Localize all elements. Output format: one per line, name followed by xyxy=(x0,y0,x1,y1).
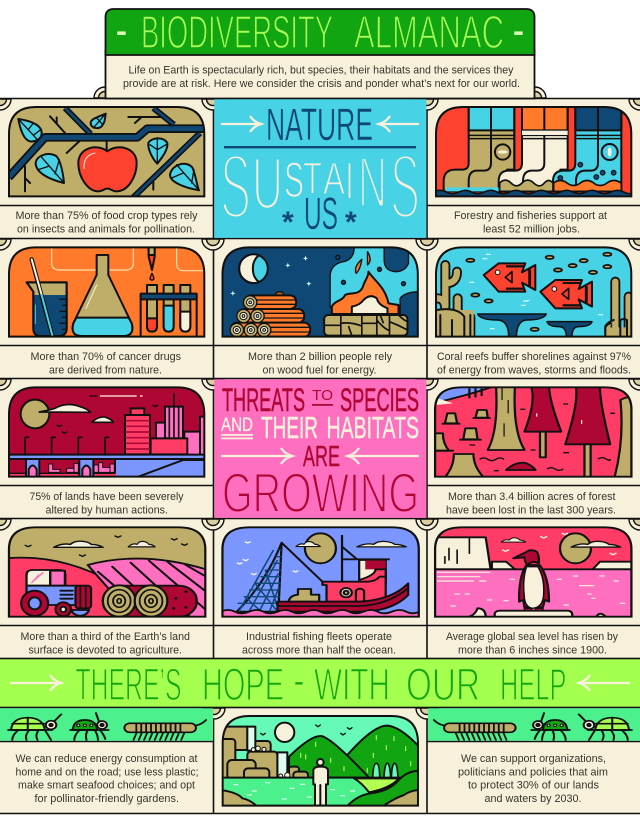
text: actions right: and waters by 2030. xyxy=(484,793,582,805)
heading: and: AND xyxy=(221,415,253,436)
illustration: logged forest xyxy=(433,383,637,478)
text: actions right: politicians and policies that aim xyxy=(458,766,608,778)
caption: sea level: Average global sea level has risen by xyxy=(446,631,618,643)
heading: sustains: A xyxy=(323,153,345,204)
heading: to: TO xyxy=(312,387,333,404)
heading: habitats: HABITATS xyxy=(326,410,419,445)
caption: fishing fleets xyxy=(242,631,396,656)
caption: cancer drugs xyxy=(30,351,181,376)
illustration: coral reef and fish xyxy=(436,247,631,337)
caption: pollination: More than 75% of food crop types rely xyxy=(16,210,198,222)
caption: lands altered xyxy=(30,491,184,516)
illustration: city xyxy=(7,387,210,479)
heading: sustains: I xyxy=(347,153,352,209)
illustration: apple and leaves xyxy=(9,107,207,197)
panel: threats are growing xyxy=(214,379,426,524)
heading: nature: NATURE xyxy=(266,99,373,150)
caption: wood fuel: More than 2 billion people rely xyxy=(248,351,392,363)
caption: fishing fleets: Industrial fishing fleets operate xyxy=(246,631,392,643)
text: actions left: We can reduce energy consumption at xyxy=(16,753,198,765)
illustration: laboratory xyxy=(9,245,207,337)
illustration: boots xyxy=(434,105,636,198)
asterisk left: * xyxy=(282,206,294,239)
caption: forest lost: have been lost in the last 300 years. xyxy=(446,504,616,516)
panel: nature sustains us: S xyxy=(390,136,420,238)
caption: sea level: more than 6 inches since 1900. xyxy=(458,644,607,656)
caption: fishing fleets: across more than half the ocean. xyxy=(242,644,396,656)
caption: cancer drugs: are derived from nature. xyxy=(49,364,162,376)
banner: there's hope xyxy=(0,658,640,710)
insect strip right xyxy=(428,708,640,741)
title word one: BIODIVERSITY xyxy=(141,6,333,58)
caption: coral reefs xyxy=(437,351,631,376)
intro text xyxy=(123,64,520,90)
title word two: ALMANAC xyxy=(354,6,504,58)
title dash right: - xyxy=(513,15,524,48)
heading: sustains: S xyxy=(284,152,304,208)
text: actions right: We can support organizations, xyxy=(461,753,606,765)
text: actions left: for pollinator-friendly gardens. xyxy=(34,793,179,805)
banner heading: HELP xyxy=(500,659,566,710)
text: actions left: make smart seafood choices; and opt xyxy=(18,780,196,792)
heading: species: SPECIES xyxy=(340,382,419,418)
caption: jobs: Forestry and fisheries support at xyxy=(454,210,608,222)
caption: sea level xyxy=(446,631,618,656)
heading: growing: GROWING xyxy=(222,461,419,524)
heading: sustains: S xyxy=(220,136,251,238)
arrow left xyxy=(348,448,419,464)
arrow left xyxy=(379,116,419,132)
illustration: farm and tractor xyxy=(6,527,208,618)
banner heading: HOPE xyxy=(202,659,284,710)
arrow right xyxy=(221,116,261,132)
caption: forest lost xyxy=(446,491,616,516)
caption: forest lost: More than 3.4 billion acres of forest xyxy=(448,491,616,503)
caption: coral reefs: Coral reefs buffer shorelines against 97% xyxy=(437,351,631,363)
icon: beetles and caterpillar xyxy=(8,713,206,740)
illustration: penguin and sea level xyxy=(433,527,635,619)
text: actions left xyxy=(16,753,198,805)
heading: sustains xyxy=(220,136,420,238)
banner heading: OUR xyxy=(406,659,480,710)
insect strip left xyxy=(0,708,213,741)
icon: mirrored beetles and caterpillar xyxy=(434,713,632,740)
caption: agriculture xyxy=(20,631,190,656)
heading: are: ARE xyxy=(303,441,340,473)
caption: lands altered: altered by human actions. xyxy=(46,504,168,516)
illustration: lake and mountains xyxy=(221,716,421,808)
text: actions left: home and on the road; use less plastic; xyxy=(16,766,198,778)
arrow right xyxy=(10,675,61,691)
text: actions right xyxy=(458,753,608,805)
heading: sustains: N xyxy=(358,143,387,223)
caption: jobs xyxy=(454,210,608,236)
caption: lands altered: 75% of lands have been severely xyxy=(30,491,184,503)
banner heading xyxy=(76,659,566,710)
title panel xyxy=(106,6,534,98)
intro text: provide are at risk. Here we consider the crisis and ponder what’s next for our world. xyxy=(123,78,520,90)
caption: agriculture: More than a third of the Earth’s land xyxy=(20,631,190,643)
caption: coral reefs: of energy from waves, storms and floods. xyxy=(437,364,631,376)
illustration: fishing boat xyxy=(220,527,420,618)
title dash left: - xyxy=(116,15,127,48)
caption: agriculture: surface is devoted to agriculture. xyxy=(28,644,182,656)
caption: pollination: on insects and animals for pollination. xyxy=(17,224,195,236)
caption: pollination xyxy=(16,210,198,236)
banner heading: WITH xyxy=(314,659,390,710)
arrow left xyxy=(579,675,630,691)
caption: jobs: least 52 million jobs. xyxy=(483,224,580,236)
heading: us: US xyxy=(304,188,338,239)
intro text: Life on Earth is spectacularly rich, but species, their habitats and the services they xyxy=(128,64,514,76)
caption: wood fuel: on wood fuel for energy. xyxy=(262,364,376,376)
text: actions right: to protect 30% of our lands xyxy=(468,780,599,792)
illustration: campfire and logs xyxy=(222,245,420,337)
banner heading: THERE’S xyxy=(76,659,182,710)
banner heading: - xyxy=(294,665,304,698)
heading: threats: THREATS xyxy=(222,382,305,418)
caption: wood fuel xyxy=(248,351,392,376)
heading: their: THEIR xyxy=(261,410,318,445)
heading: sustains: U xyxy=(252,142,283,225)
asterisk right: * xyxy=(345,206,357,239)
panel: nature sustains us xyxy=(214,99,426,239)
heading: sustains: T xyxy=(303,153,322,204)
caption: cancer drugs: More than 70% of cancer drugs xyxy=(30,351,181,363)
arrow right xyxy=(221,448,292,464)
